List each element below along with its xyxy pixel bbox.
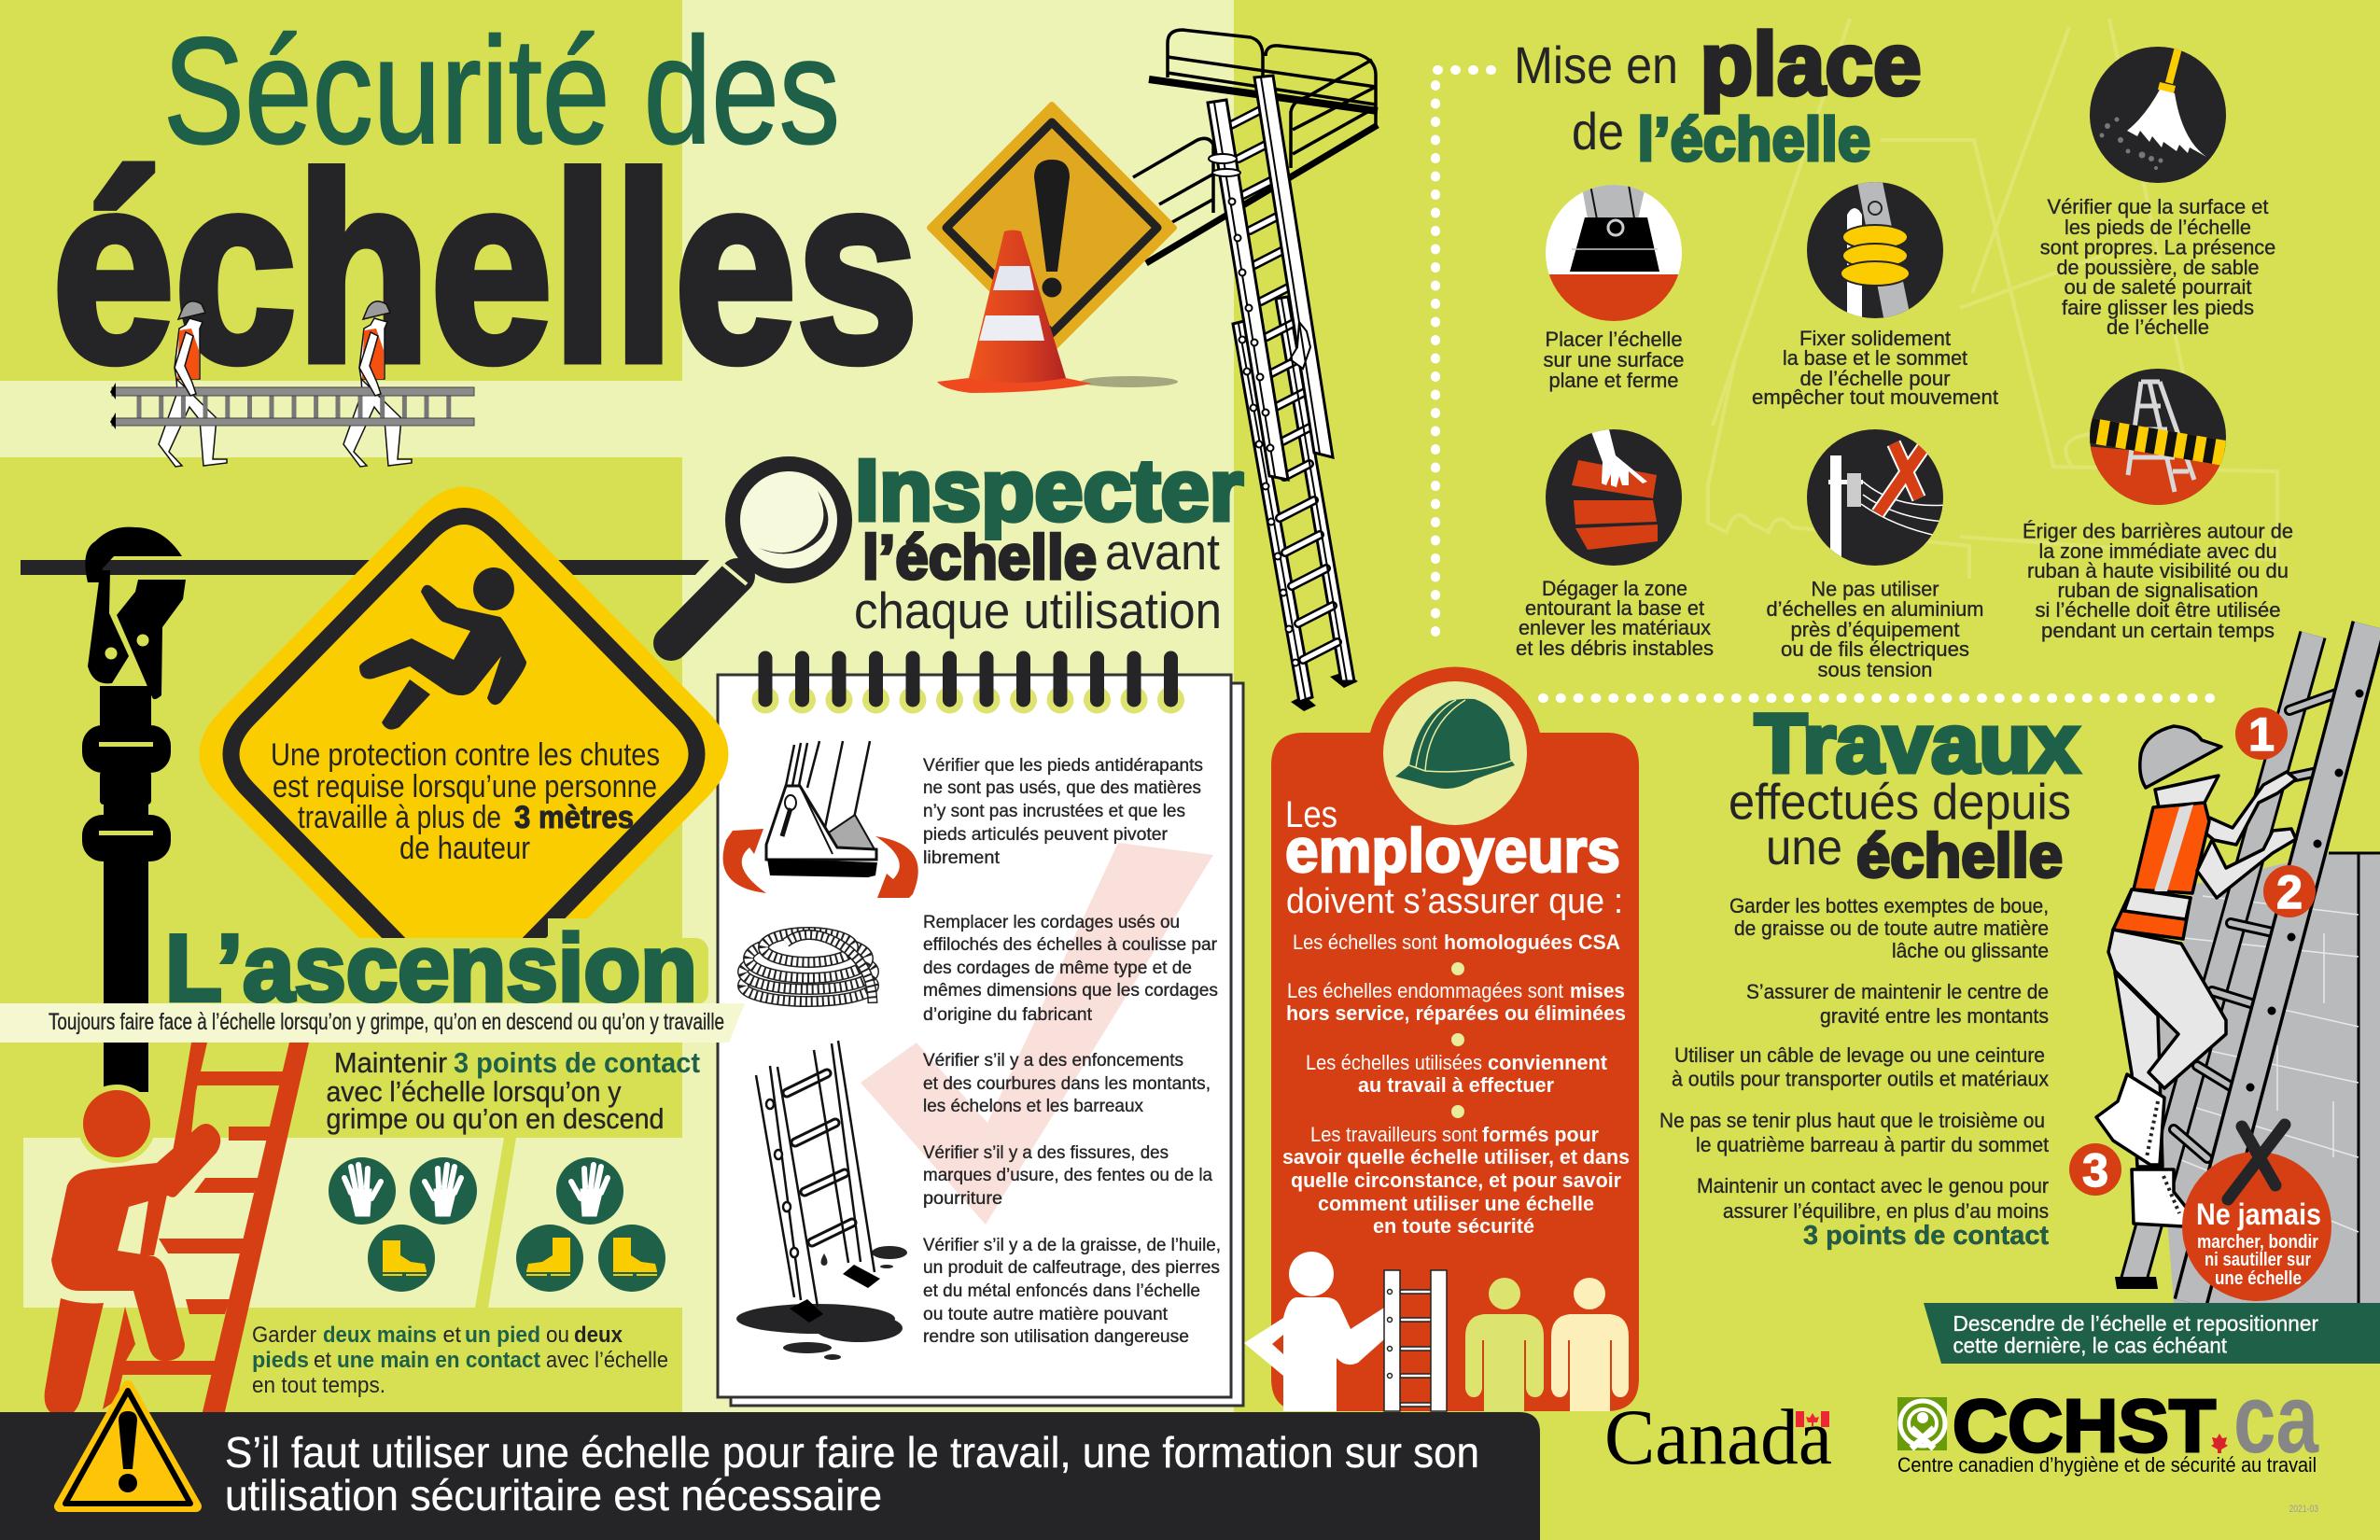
text: si l’échelle doit être utilisée (2035, 598, 2281, 622)
text: ruban de signalisation (2057, 579, 2259, 602)
checklist text: un produit de calfeutrage, des pierres (923, 1257, 1220, 1278)
text: work rules: 3 points de contact (1803, 1221, 2049, 1251)
text: maintain 3 points of contact: Maintenir (334, 1046, 447, 1079)
callout: never jump: une échelle (2215, 1268, 2302, 1289)
number badges: 2 (2276, 866, 2303, 918)
checklist text: rendre son utilisation dangereuse (923, 1326, 1189, 1347)
checklist text: des cordages de même type et de (923, 958, 1192, 978)
title (52, 7, 918, 417)
heading: mise en place: de (1572, 102, 1624, 161)
text: keep two hands and one foot: et (314, 1348, 331, 1373)
text: work rules: Garder les bottes exemptes de boue, (1729, 894, 2049, 917)
text: enlever les matériaux (1519, 616, 1711, 639)
text: employer duties: en toute sécurité (1373, 1214, 1534, 1238)
text: de l’échelle pour (1799, 367, 1951, 390)
harness strap and hook (82, 527, 186, 1092)
heading: travaux: Travaux (1755, 696, 2079, 790)
ribbon: always face the ladder: Toujours faire face à l’échelle lorsqu’on y grimpe, qu’on en descend ou qu’on y travaille (49, 1009, 724, 1035)
number badges: 3 (2082, 1144, 2108, 1197)
heading: travaux: échelle (1856, 821, 2063, 890)
heading: mise en place: place (1701, 15, 1921, 114)
icon: warning sign (930, 105, 1174, 350)
heading: inspecter: chaque utilisation (854, 581, 1222, 639)
text: sous tension (1818, 658, 1932, 681)
checklist text: Remplacer les cordages usés ou (923, 912, 1180, 932)
wall (2160, 853, 2380, 1303)
checklist text: effilochés des échelles à coulisse par (923, 934, 1217, 955)
checklist text: marques d’usure, des fentes ou de la (923, 1165, 1212, 1185)
checklist text: ou toute autre matière pouvant (923, 1304, 1169, 1324)
ribbon: always face the ladder (0, 1003, 745, 1043)
text: d’échelles en aluminium (1766, 597, 1984, 621)
heading: inspecter (854, 441, 1243, 639)
callout: never jump: ni sautiller sur (2205, 1250, 2311, 1270)
checklist text: les échelons et les barreaux (923, 1096, 1143, 1116)
text: work rules: Utiliser un câble de levage ou une ceinture (1674, 1043, 2045, 1067)
logo: CCHST (1897, 1365, 2319, 1477)
text: keep two hands and one foot: et (442, 1323, 461, 1348)
climber (2096, 726, 2296, 1226)
rope line (21, 560, 709, 575)
text: Dégager la zone (1542, 577, 1687, 600)
text: work rules: S’assurer de maintenir le centre de (1746, 980, 2049, 1003)
text: ou de saleté pourrait (2065, 275, 2251, 299)
text: keep two hands and one foot: deux mains (323, 1323, 437, 1348)
text: faire glisser les pieds (2062, 296, 2254, 319)
text: training required: S’il faut utiliser une échelle pour faire le travail, une formation sur son (225, 1428, 1479, 1477)
text: fall protection requirement: 3 mètres (514, 800, 634, 835)
text: employer duties: au travail à effectuer (1358, 1073, 1554, 1097)
text: employer duties: Les échelles endommagées sont (1287, 979, 1563, 1002)
illustration: worker climbing ladder (2069, 625, 2380, 1303)
text: employer duties: Les échelles utilisées (1306, 1051, 1482, 1074)
item: avoid live wires (1766, 425, 1984, 681)
text: la base et le sommet (1783, 346, 1967, 370)
text: work rules: assurer l’équilibre, en plus d’au moins (1723, 1199, 2049, 1223)
item: stable surface (1540, 177, 1689, 392)
icon: magnifying glass (671, 464, 845, 643)
logo: CCHST: Centre canadien d’hygiène et de sécurité au travail (1897, 1453, 2317, 1477)
ladder (2115, 625, 2369, 1303)
title: Sécurité des (163, 7, 840, 175)
checklist text: Vérifier s’il y a des fissures, des (923, 1142, 1169, 1163)
checklist text: n’y sont pas incrustées et que les (923, 801, 1185, 821)
heading: inspecter: Inspecter (855, 441, 1243, 539)
icon: ladder foot with arrows (723, 741, 918, 898)
text: work rules: lâche ou glissante (1892, 939, 2049, 962)
text: keep two hands and one foot: pieds (252, 1348, 309, 1373)
checklist text: et des courbures dans les montants, (923, 1073, 1211, 1094)
text: work rules (1659, 894, 2050, 1251)
icon: broom (2090, 47, 2226, 183)
text: ruban à haute visibilité ou du (2027, 559, 2289, 582)
notebook: inspection checklist (718, 658, 1243, 1406)
text: work rules: le quatrième barreau à partir du sommet (1696, 1133, 2050, 1156)
text: keep two hands and one foot: ou (546, 1323, 569, 1348)
heading: mise en place: Mise en (1514, 35, 1678, 94)
checklist text: et du métal enfoncés dans l’échelle (923, 1281, 1200, 1301)
text: Ne pas utiliser (1811, 577, 1939, 601)
logo: CCHST: ca (2233, 1365, 2319, 1474)
checklist text: ne sont pas usés, que des matières (923, 777, 1201, 798)
icon: one hand two feet (516, 1157, 665, 1292)
icon: supervisor with ladder and workers (1244, 1252, 1629, 1411)
logo: CCHST: CCHST (1953, 1384, 2216, 1467)
text (1544, 328, 1684, 392)
text: empêcher tout mouvement (1752, 385, 1998, 409)
callout: never jump (2182, 1125, 2331, 1301)
text: plane et ferme (1549, 369, 1678, 392)
text: employer duties: Les échelles sont (1293, 931, 1437, 954)
checklist text: d’origine du fabricant (923, 1004, 1093, 1025)
icon: electric pole with red X (1807, 429, 1943, 566)
text: employer duties: formés pour (1482, 1123, 1599, 1146)
logo: Canada wordmark: Canada (1604, 1393, 1832, 1481)
title: échelles (52, 120, 918, 417)
text: fall protection requirement: travaille à plus de (298, 800, 501, 835)
text: fall protection requirement: est requise lorsqu’une personne (273, 769, 657, 805)
text: Fixer solidement (1799, 327, 1951, 350)
checklist text: pourriture (923, 1188, 1002, 1209)
text: employer duties: conviennent (1488, 1051, 1608, 1074)
text (2040, 195, 2275, 339)
item: clear the area (1516, 425, 1714, 660)
heading: les employeurs (1285, 794, 1623, 921)
text: de poussière, de sable (2057, 256, 2259, 279)
text: keep two hands and one foot: deux (574, 1323, 623, 1348)
text: training required (225, 1428, 1479, 1519)
text: keep two hands and one foot: une main en contact (337, 1348, 540, 1373)
item: tie off ladder (1752, 177, 1998, 409)
text: employer duties: quelle circonstance, et pour savoir (1291, 1169, 1621, 1192)
text: work rules: gravité entre les montants (1820, 1004, 2049, 1028)
text: fall protection requirement (271, 737, 660, 866)
heading: les employeurs: doivent s’assurer que : (1286, 882, 1623, 921)
text: les pieds de l’échelle (2065, 216, 2251, 239)
text: ou de fils électriques (1781, 637, 1969, 661)
workers carrying a ladder (110, 301, 474, 467)
text: fall protection requirement: Une protection contre les chutes (271, 737, 660, 773)
checklist text: librement (923, 847, 1001, 868)
checklist text: Vérifier s’il y a des enfoncements (923, 1050, 1183, 1071)
heading: les employeurs: employeurs (1285, 816, 1620, 885)
platform behind the warning sign (1133, 30, 1378, 263)
banner: reposition the ladder (1924, 1303, 2380, 1364)
icon: rope tied to rail (1807, 182, 1943, 318)
text: employer duties (1282, 931, 1630, 1238)
text: sur une surface (1544, 348, 1684, 371)
date code: 2021-03 (2289, 1504, 2318, 1515)
text: keep two hands and one foot (252, 1323, 668, 1398)
text: près d’équipement (1790, 618, 1960, 641)
icon: warning triangle (60, 1386, 196, 1506)
text: training required: utilisation sécuritaire est nécessaire (225, 1471, 882, 1519)
text: fall protection requirement: de hauteur (399, 831, 530, 866)
text: keep two hands and one foot: avec l’échelle (546, 1348, 668, 1373)
icon: traffic cone (937, 230, 1178, 393)
text: et les débris instables (1516, 637, 1714, 660)
text: la zone immédiate avec du (2038, 539, 2277, 563)
icon: falling person (359, 567, 526, 730)
icon: coil of rope (743, 932, 874, 1003)
panel: contact combinations (23, 1138, 682, 1308)
banner: reposition the ladder: cette dernière, le cas échéant (1953, 1333, 2228, 1357)
heading: travaux (1729, 696, 2079, 890)
text: de l’échelle (2107, 315, 2209, 339)
checklist text: pieds articulés peuvent pivoter (923, 824, 1168, 845)
text: employer duties: hors service, réparées ou éliminées (1286, 1001, 1626, 1025)
text: Vérifier que la surface et (2048, 195, 2268, 218)
text: employer duties: homologuées CSA (1444, 931, 1620, 954)
heading: travaux: une (1766, 819, 1842, 875)
text: Ériger des barrières autour de (2023, 519, 2293, 543)
text (1516, 577, 1714, 660)
item: barriers (2023, 364, 2293, 642)
heading: mise en place (1514, 15, 1921, 174)
text: Placer l’échelle (1546, 328, 1682, 351)
number badges (2069, 707, 2316, 1197)
checklist text: Vérifier s’il y a de la graisse, de l’huile, (923, 1235, 1221, 1255)
icon: ladder with oil spill (736, 1041, 907, 1360)
text (1752, 327, 1998, 409)
icon: orange climbing figure and ladder (45, 1043, 309, 1417)
bottom banner (0, 1386, 1540, 1540)
heading: mise en place: l’échelle (1637, 105, 1870, 174)
text: maintain 3 points of contact (327, 1046, 700, 1135)
text: keep two hands and one foot: en tout temps. (252, 1373, 385, 1398)
text: pendant un certain temps (2041, 619, 2275, 642)
number badges: 1 (2248, 708, 2275, 761)
icon: hard hat (1395, 699, 1515, 789)
icon: ladder foot on ground (1546, 185, 1682, 321)
text: entourant la base et (1525, 596, 1704, 620)
text: work rules: à outils pour transporter outils et matériaux (1672, 1068, 2050, 1090)
text: maintain 3 points of contact: avec l’échelle lorsqu’on y (327, 1075, 622, 1108)
icon: stepladder with barrier tape (2090, 369, 2226, 505)
warning diamond: fall protection (200, 487, 728, 1021)
heading: travaux: effectués depuis (1729, 775, 2071, 831)
checklist text: mêmes dimensions que les cordages (923, 980, 1218, 1001)
heading: inspecter: l’échelle (862, 523, 1097, 593)
item: clean surface (2040, 42, 2275, 339)
callout: never jump: marcher, bondir (2197, 1232, 2318, 1253)
extension ladder (1208, 76, 1358, 711)
text: employer duties: savoir quelle échelle utiliser, et dans (1282, 1145, 1630, 1169)
text (2023, 519, 2293, 642)
text: employer duties: comment utiliser une échelle (1318, 1192, 1594, 1215)
callout: never jump: Ne jamais (2196, 1197, 2321, 1231)
text: work rules: Maintenir un contact avec le genou pour (1697, 1174, 2049, 1197)
text (1766, 577, 1984, 681)
checklist text: Vérifier que les pieds antidérapants (923, 755, 1203, 776)
text: keep two hands and one foot: un pied (465, 1323, 540, 1348)
icon: hand and bricks (1546, 429, 1682, 566)
text: employer duties: Les travailleurs sont (1310, 1123, 1477, 1146)
icon: two hands one foot (329, 1157, 477, 1292)
checklist text (923, 755, 1221, 1347)
text: keep two hands and one foot: Garder (252, 1323, 316, 1348)
text: work rules: de graisse ou de toute autre matière (1734, 917, 2049, 940)
text: maintain 3 points of contact: grimpe ou qu’on en descend (327, 1102, 665, 1135)
banner: reposition the ladder: Descendre de l’échelle et repositionner (1953, 1311, 2318, 1336)
text: employer duties: mises (1570, 979, 1625, 1002)
text: sont propres. La présence (2040, 235, 2275, 259)
panel: employers (1244, 667, 1639, 1411)
text: maintain 3 points of contact: 3 points de contact (454, 1046, 700, 1079)
text: work rules: Ne pas se tenir plus haut que le troisième ou (1659, 1109, 2045, 1132)
heading: les employeurs: Les (1285, 794, 1337, 835)
dotted dividers (1435, 70, 2210, 698)
heading: l'ascension: L’ascension (165, 917, 697, 1021)
heading: inspecter: avant (1105, 523, 1220, 581)
